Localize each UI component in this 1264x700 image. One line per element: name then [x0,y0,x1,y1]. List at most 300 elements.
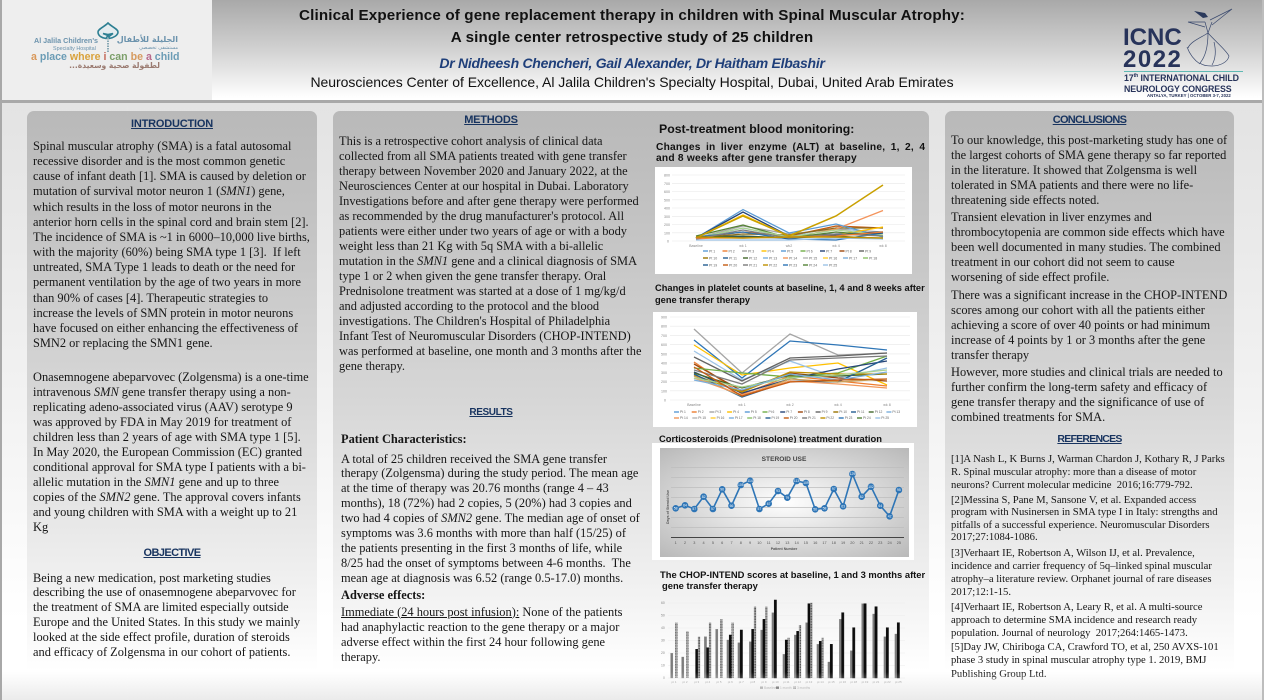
x axis numbers: 12 [776,541,780,545]
x axis numbers: 25 [897,541,901,545]
x axis numbers: 19 [841,541,845,545]
reference 2: pitfalls of a successful experience. Neuromuscular Disorders [951,520,1210,531]
text: methods: This is a retrospective cohort analysis of clinical data [339,134,603,148]
legend: Pt 3 [748,250,754,254]
x axis labels: pt 15 [828,680,835,684]
y axis labels [664,174,670,244]
heading: objective: OBJECTIVE [144,547,200,559]
x axis labels: wk2 [786,244,792,248]
text: methods: was performed at baseline, one month and 3 months after the [339,344,641,358]
x axis numbers: 10 [757,541,762,545]
text: patient characteristics: therapy (Zolgensma) during the study period. The mean age [341,466,638,480]
data values: 129 [850,472,855,476]
congress name: NEUROLOGY CONGRESS [1124,84,1232,94]
text: conclusion 2: been well documented in many studies. The combined [951,240,1221,254]
data values: 58 [674,506,678,510]
data values: 109 [803,481,809,485]
chart heading: CHOP-INTEND: The CHOP-INTEND scores at baseline, 1 and 3 months after [660,568,925,580]
x axis numbers: 4 [703,541,705,545]
logo name English [34,36,98,52]
x axis labels: pt 3 [694,680,700,684]
chart heading: corticosteroids: Corticosteroids (Prednisolone) treatment duration [659,432,882,444]
legend: Pt 4 [733,410,739,414]
text: conclusion 3: increase of 4 points by 1 or 3 months after the gene [951,333,1205,347]
legend: Pt 21 [808,416,816,420]
chart heading: liver enzyme: Changes in liver enzyme (ALT) at baseline, 1, 2, 4 [656,142,925,152]
x axis numbers [675,541,901,545]
reference 2: 2017;27:1084-1086. [951,532,1038,543]
legend: Pt 12 [875,410,883,414]
title [299,7,965,46]
reference 4 [951,602,1202,638]
text: patient characteristics: symptoms was 3.6 months with more than half (15/25) of [341,526,626,540]
heading: methods: METHODS [464,114,518,126]
legend: Pt 21 [749,264,757,268]
legend: Pt 8 [804,410,810,414]
reference 5: [5]Day JW, Chiriboga CA, Crawford TO, et al, 250 AVXS-101 [951,642,1219,653]
text: patient characteristics: A total of 25 children received the SMA gene transfer [341,452,607,466]
text: objective: Being a new medication, post marketing studies [33,570,271,584]
line chart: liver enzyme ALT [655,167,912,274]
text: introduction paragraph 1: have focused on either enhancing the effectiveness of [33,321,298,335]
data values: 57 [692,507,696,511]
chart heading: CHOP-INTEND [660,568,925,591]
text: methods: patients were either under two years of age or with a body [339,224,627,238]
text: introduction paragraph 2: In May 2020, the European Commission (EC) granted [33,444,302,458]
x axis labels: pt 1 [671,680,677,684]
text: introduction paragraph 2: copies of the SMN2 gene. The approval covers infants [33,490,301,504]
text: introduction paragraph 1: mutation of survival motor neuron 1 (SMN1) gene, [33,184,285,198]
y axis labels: 100 [661,389,667,393]
text: conclusion 3: achieving a score of over 40 points or had minimum [951,318,1210,332]
x axis labels: wk 8 [879,244,887,248]
text: introduction paragraph 2: allelic mutation in the SMN1 gene and up to three [33,474,279,488]
y axis labels: 200 [661,380,667,384]
x axis labels: wk 4 [832,244,840,248]
x axis labels: pt 5 [716,680,722,684]
text: methods: Infant Test of Neuromuscular Disorders (CHOP-INTEND) [339,328,631,342]
baseline bars [671,604,897,678]
text: conclusion 2: thrombocytopenia are common side effects which have [951,225,1225,239]
data values: 57 [758,507,761,511]
legend: Pt 1 [709,250,715,254]
data points [672,471,902,520]
text: conclusion 1 [951,132,1228,207]
x axis numbers: 24 [887,541,892,545]
chart heading: platelet counts [655,282,925,305]
legend: Pt 19 [709,264,717,268]
text: patient characteristics [341,452,640,585]
y axis labels: 100 [664,231,670,235]
text: introduction paragraph 2: Onasemnogene abeparvovec (Zolgensma) is a one-time [33,370,309,384]
x axis numbers: 15 [804,541,808,545]
text: introduction paragraph 1: anterior horn cells in the spinal cord and brain stem [2]. [33,215,309,229]
text: methods: collected from all SMA patients treated with gene transfer [339,148,627,162]
text: conclusion 1: tolerated in SMA patients and there were no life- [951,178,1193,192]
heading: post-treatment blood monitoring: Post-treatment blood monitoring: [659,122,854,136]
legend: Pt 14 [789,256,797,260]
data values: 58 [823,506,826,510]
axis titles: Patient Number [771,547,798,551]
data values: 97 [832,487,836,491]
text: introduction paragraph 1: permanent ventilation by the age of two years in more [33,275,301,289]
text: introduction paragraph 1: The incidence of SMA is ~1 in 6000–10,000 live births, [33,230,310,244]
text: methods: weight less than 21 Kg with 5q SMA with a bi-allelic [339,238,603,252]
logo name Arabic [117,34,178,51]
reference 3 [951,548,1212,598]
legend: Pt 9 [822,410,828,414]
reference 2: program with Nusinersen in SMA type I in Italy: strengths and [951,507,1218,518]
text: introduction paragraph 1: which results in the loss of motor neurons in the [33,200,272,214]
text: introduction paragraph 1: recessive disorder and is the most common genetic [33,154,285,168]
y axis labels: 500 [661,352,667,356]
logo name English: Al Jalila Children's [34,36,98,45]
legend [709,250,877,268]
legend: Pt 15 [809,256,817,260]
text: patient characteristics: two had 4 copies of SMN2 gene. The median age of onset of [341,511,640,525]
x axis labels [671,680,902,684]
subheading: adverse effects: Adverse effects: [341,588,425,602]
text: methods: therapy between November 2020 and January 2022, at the [339,164,628,178]
text: conclusion 3: transfer therapy [951,348,1029,362]
legend: Pt 22 [769,264,777,268]
text: objective: describing the use of onasemnogene abeparvovec for [33,585,296,599]
reference 4: [4]Verhaart IE, Robertson A, Leary R, et al. A multi-source [951,602,1202,612]
text: conclusion 3 [951,288,1227,362]
data values: 63 [841,504,845,508]
data lines [696,185,883,240]
text: adverse effects [341,604,622,664]
x axis labels: pt 6 [728,680,733,684]
legend: Pt 20 [729,264,737,268]
text: objective: the treatment of SMA are limited especially outside [33,600,289,614]
reference 1: R. Spinal muscular atrophy: more than a disease of motor [951,467,1196,478]
bar chart: CHOP-INTEND scores [661,600,905,690]
legend: Pt 2 [698,410,704,414]
y axis labels: 200 [664,223,670,227]
legend: Pt 14 [680,416,688,420]
text: conclusion 1: in the literature. It showed that Zolgensma is well [951,163,1197,177]
y axis labels: 500 [664,198,670,202]
text: patient characteristics: 8/25 had the onset of symptoms between 4-6 months. The [341,556,631,570]
text: introduction paragraph 1: increase the levels of SMN protein in motor neurons [33,306,293,320]
legend: Pt 23 [845,416,853,420]
y axis labels: 300 [661,371,667,375]
text: methods: mutation in the SMN1 gene and a clinical diagnosis of SMA [339,254,637,268]
text: introduction paragraph 1: SMN2 or replacing the SMN1 gene. [33,336,213,350]
text: conclusion 3: There was a significant increase in the CHOP-INTEND [951,288,1227,302]
text: methods: as recommended by the drug manufacturer's protocol. All [339,208,624,222]
ICNC wordmark: ICNC [1123,24,1182,51]
y axis labels: 900 [661,316,667,320]
affiliation: Neurosciences Center of Excellence, Al Jalila Children's Specialty Hospital, Dubai, United Arab Emirates [310,74,954,90]
title: Clinical Experience of gene replacement therapy in children with Spinal Muscular Atrophy: [299,7,965,24]
y axis labels: 700 [664,182,670,186]
x axis numbers: 1 [675,541,677,545]
x axis labels: pt 11 [783,680,790,684]
legend: Pt 24 [809,264,817,268]
legend: Pt 17 [849,256,857,260]
text: introduction paragraph 2: children less than 2 years of age with SMA type 1 [5]. [33,430,301,444]
x axis labels: wk 1 [739,244,747,248]
text: conclusion 4 [951,364,1223,424]
text: conclusion 1: To our knowledge, this post-marketing study has one of [951,132,1227,146]
ICNC wordmark [1123,24,1182,73]
legend: Pt 6 [768,410,775,414]
heading: conclusions: CONCLUSIONS [1053,114,1126,126]
legend: Pt 19 [772,416,779,420]
y axis labels: 600 [661,343,667,347]
chart title: STEROID USE [762,456,807,463]
data values: 113 [794,479,799,483]
reference 4: approach to determine SMA incidence and research ready [951,614,1197,626]
chart heading: CHOP-INTEND: gene transfer therapy [662,580,758,591]
header band [0,0,1264,103]
legend: Pt 15 [698,416,706,420]
congress name: 17th INTERNATIONAL CHILD [1124,73,1239,83]
text: methods: gene therapy. [339,358,405,372]
legend: Pt 25 [881,416,889,420]
reference 3: 2017;12:1-15. [951,587,1011,598]
legend: Pt 16 [717,416,724,420]
x axis labels: pt 14 [817,680,824,684]
legend: Pt 10 [709,256,717,260]
legend: Pt 1 [680,410,686,414]
text: conclusion 2: treatment in our cohort did not seem to cause [951,255,1175,269]
text: conclusion 2 [951,210,1225,284]
reference 1: [1]A Nash L, K Burns J, Warman Chardon J, Kothary R, J Parks [951,454,1225,465]
legend: Pt 4 [768,250,774,254]
text: patient characteristics: the patients presenting in the first 3 months of life, while [341,541,622,555]
x axis labels: pt 10 [772,680,779,684]
legend: Pt 24 [863,416,871,420]
data values: 93 [776,489,780,493]
x axis labels: wk 2 [786,403,794,407]
data values: 56 [813,508,817,512]
y axis labels: 600 [664,190,670,194]
reference 5 [951,642,1219,680]
y axis labels: 800 [661,325,667,329]
text: adverse effects: Immediate (24 hours post infusion): None of the patients [341,604,622,618]
legend: Pt 11 [729,256,737,260]
x axis numbers: 11 [767,541,771,545]
text: introduction paragraph 2: Kg [33,520,48,534]
reference 3: incidence and carrier frequency of 5q–linked spinal muscular [951,561,1212,572]
text: introduction paragraph 1: Spinal muscular atrophy (SMA) is a fatal autosomal [33,139,291,153]
x axis labels: wk 8 [883,403,891,407]
data line [676,474,899,516]
text: introduction paragraph 2: was approved by FDA in May 2019 for treatment of [33,414,291,428]
y axis labels: 400 [664,206,670,210]
legend: Pt 9 [865,250,871,254]
legend: Pt 10 [839,410,847,414]
congress location: ANTALYA, TURKEY | OCTOBER 3-7, 2022 [1147,92,1231,98]
legend: Pt 7 [826,250,832,254]
x axis numbers: 20 [850,541,855,545]
x axis numbers: 18 [832,541,836,545]
reference 3: [3]Verhaart IE, Robertson A, Wilson IJ, et al. Prevalence, [951,548,1195,559]
logo name Arabic: الجليلة للأطفال [117,35,178,44]
text: conclusion 4: combined treatments for SMA. [951,410,1105,424]
data values: 82 [702,495,706,499]
legend: Pt 25 [829,264,837,268]
legend: Pt 17 [735,416,743,420]
x axis numbers: 2 [684,541,686,545]
teal rule [1124,70,1243,72]
heading: results: RESULTS [469,407,513,418]
x axis labels: Baseline [689,244,703,248]
heading: references: REFERENCES [1057,433,1122,445]
legend: Pt 18 [753,416,761,420]
y axis labels: 0 [664,398,666,402]
panel: conclusions and references [945,111,1234,700]
text: adverse effects: adverse effect within the first 24 hour following gene [341,635,605,649]
text: introduction paragraph 1 [33,139,310,350]
legend: Pt 12 [749,256,757,260]
x axis numbers: 22 [869,541,873,545]
legend: Pt 2 [728,250,735,254]
y axis labels: 40 [661,626,665,630]
legend: 1 month [780,686,792,690]
logo: Al Jalila Children's Specialty Hospital [2,0,212,100]
reference 3: atrophy–a literature review. Orphanet journal of rare diseases [951,574,1211,585]
text: methods: Prednisolone treatment was started at a dose of 1 mg/kg/d [339,284,626,298]
logo name English: Specialty Hospital [53,46,96,52]
logo tagline Arabic: لطفولة صحية وسعيدة... [69,61,160,70]
y axis labels: 20 [661,651,665,655]
text: introduction paragraph 2 [33,370,309,534]
text: methods: Neurosciences Center at our hospital in Dubai. Laboratory [339,178,629,192]
x axis labels: pt 22 [884,680,891,684]
x axis numbers: 7 [730,541,733,545]
data values: 96 [720,488,724,492]
line chart: platelet counts [653,312,917,427]
text: objective [33,570,300,659]
text: introduction paragraph 2: and young children with SMA with a weight up to 21 [33,504,297,518]
x axis numbers: 3 [693,541,695,545]
text: patient characteristics: months), 18 (72%) had 2 copies, 5 (20%) had 3 copies and [341,496,632,510]
data values: 79 [785,496,789,500]
chart heading: liver enzyme: and 8 weeks after gene transfer therapy [656,153,857,164]
text: introduction paragraph 1: cause of infant death [1]. SMA is caused by deletion or [33,169,306,183]
data values: 114 [747,479,753,483]
panel: introduction and objective [27,111,317,700]
x axis numbers: 16 [813,541,817,545]
reference 5: phase 3 study in spinal muscular atrophy type 1. 2019, BMJ [951,655,1206,666]
legend: Pt 8 [846,250,852,254]
x axis labels: pt 9 [761,680,767,684]
legend: Pt 13 [769,256,777,260]
text: introduction paragraph 2: intravenous SMN gene transfer therapy using a non- [33,384,291,398]
x axis labels: pt 25 [895,680,902,684]
y axis labels: 10 [661,664,665,668]
x axis numbers: 13 [785,541,789,545]
congress name [1124,73,1239,94]
x axis labels: pt 13 [806,680,813,684]
y axis labels: 60 [661,601,665,605]
data values: 64 [878,504,882,508]
x axis labels: pt 19 [862,680,869,684]
data values: 57 [711,507,715,511]
text: conclusion 4: further confirm the long-term safety and efficacy of [951,380,1207,394]
x axis labels: pt 2 [682,680,688,684]
chart heading: platelet counts: gene transfer therapy [655,294,750,304]
reference 5: Publishing Group Ltd. [951,669,1046,680]
logo: ICNC 2022 [1123,8,1243,98]
legend: Baseline [764,686,776,690]
y axis labels [661,601,665,680]
legend: Pt 23 [789,264,797,268]
reference 4: population. Journal of neurology 2017;264:1465-1473. [951,628,1188,638]
data values: 82 [860,495,864,499]
text: methods: Investigations before and after gene therapy were performed [339,194,639,208]
x axis labels: wk 4 [834,403,842,407]
data values: 42 [888,514,892,518]
reference 1 [951,454,1225,491]
logo name Arabic: مستشفى تخصصي [139,45,178,51]
reference 2: [2]Messina S, Pane M, Sansone V, et al. Expanded access [951,494,1196,506]
text: objective: Europe and the United States. In this study we mainly [33,615,300,629]
x axis labels: pt 16 [839,680,846,684]
x axis numbers: 17 [822,541,827,545]
text: objective: and efficacy of Zolgensma in our cohort of patients. [33,645,290,659]
text: patient characteristics: mean age at diagnosis was 6.52 (range 0.5-17.0) months. [341,571,623,585]
data values: 67 [767,502,771,506]
text: conclusion 3: scores among our cohort with all the patients either [951,303,1205,317]
x axis numbers: 14 [794,541,799,545]
text: introduction paragraph 1: untreated, SMA Type 1 leads to death or the need for [33,260,295,274]
logo tagline: a place where i can be a child [31,50,180,62]
text: methods: investigations. The Children's Hospital of Philadelphia [339,314,610,328]
text: conclusion 4: However, more studies and clinical trials are needed to [951,364,1223,378]
data values: 66 [730,504,733,508]
ICNC wordmark: 2022 [1123,46,1182,73]
text: objective: looked at the side effect profile, duration of steroids [33,630,290,644]
x axis labels: Baseline [687,403,701,407]
y axis labels: 300 [664,215,670,219]
legend: Pt 20 [790,416,798,420]
x axis numbers: 21 [860,541,864,545]
text: patient characteristics: at the time of therapy was 20.76 months (range 4 – 43 [341,481,609,495]
reference 1: neurons? Current molecular medicine 2016;16:779-792. [951,480,1193,491]
x axis labels: pt 8 [750,680,756,684]
x axis labels: pt 21 [873,680,880,684]
text: conclusion 1: the largest cohorts of SMA gene therapy so far reported [951,148,1226,162]
x axis labels: pt 7 [739,680,744,684]
x axis numbers: 23 [878,541,882,545]
y axis labels: 0 [663,676,665,680]
text: methods: type 1 or 2 when given the gene transfer therapy. Oral [339,268,606,282]
legend: Pt 18 [869,256,877,260]
text: introduction paragraph 2: conditional approval for SMA type I patients with a bi- [33,460,306,474]
y axis labels: 30 [661,638,665,642]
text: conclusion 2: Transient elevation in liver enzymes and [951,210,1152,224]
x axis numbers: 9 [749,541,751,545]
x axis labels: pt 18 [850,680,857,684]
legend: Pt 3 [715,410,721,414]
legend: Pt 16 [829,256,837,260]
y axis labels: 800 [664,174,670,178]
line chart: steroid use: Days of Steroid Use [666,490,670,524]
data lines [694,329,887,397]
x axis numbers: 8 [740,541,742,545]
data values: 102 [868,485,874,489]
y axis labels: 400 [661,362,667,366]
text: adverse effects: had anaphylactic reaction to the gene therapy or a major [341,620,619,634]
text: conclusion 2: worsening of side effect profile. [951,270,1109,284]
y axis labels: 50 [661,614,665,618]
icon: tree logo [97,22,119,52]
